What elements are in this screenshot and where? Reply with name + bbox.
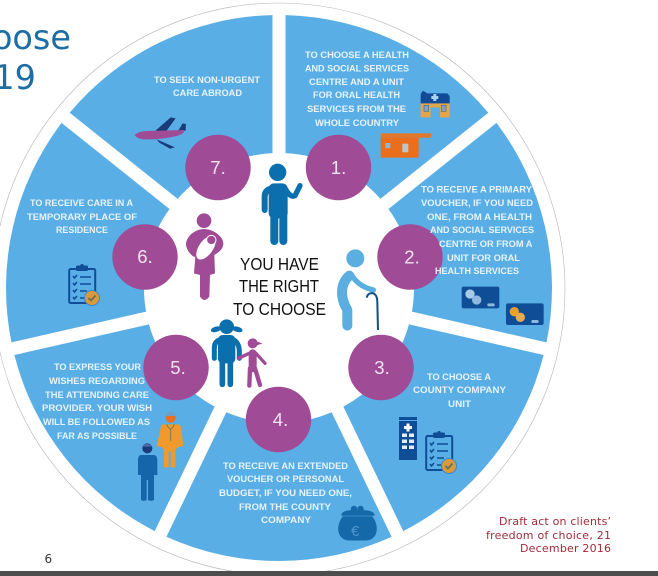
- icon: coin purse: €: [351, 523, 360, 540]
- panel: right 4, extended voucher or personal budget: [166, 387, 392, 561]
- panel: right 2, receive a primary voucher: ONE, FROM A HEALTH: [427, 212, 532, 222]
- heading: you have the right to choose: THE RIGHT: [239, 276, 319, 296]
- panel: right 6, care in a temporary place of residence: RESIDENCE: [56, 225, 108, 235]
- panel: right 4, extended voucher or personal budget: BUDGET, IF YOU NEED ONE,: [219, 488, 352, 498]
- panel: right 7, seek non-urgent care abroad: CARE ABROAD: [173, 88, 242, 98]
- panel: right 5, express your wishes: WILL BE FOLLOWED AS: [43, 417, 150, 427]
- panel: right 3, choose a county company unit: UNIT: [448, 399, 472, 409]
- panel: right 7, seek non-urgent care abroad: 7.: [210, 157, 226, 178]
- panel: right 4, extended voucher or personal budget: TO RECEIVE AN EXTENDED: [223, 461, 348, 471]
- icon: two children: [210, 319, 265, 386]
- panel: right 4, extended voucher or personal budget: 4.: [273, 409, 288, 430]
- panel: right 1, choose a health and social services centre: CENTRE AND A UNIT: [309, 77, 405, 87]
- icon: mother with baby: [186, 213, 223, 300]
- source note: [486, 515, 611, 555]
- icon: health centre house: [421, 91, 450, 117]
- panel: right 3, choose a county company unit: 3.: [374, 357, 390, 378]
- panel: right 5, express your wishes: [14, 324, 215, 531]
- panel: right 5, express your wishes: 5.: [170, 357, 186, 378]
- heading: you have the right to choose: TO CHOOSE: [233, 299, 326, 319]
- panel: right 1, choose a health and social services centre: TO CHOOSE A HEALTH: [305, 50, 409, 60]
- panel: right 2, receive a primary voucher: AND SOCIAL SERVICES: [430, 225, 534, 235]
- panel: right 2, receive a primary voucher: 2.: [404, 246, 420, 268]
- panel: right 5, express your wishes: PROVIDER. YOUR WISH: [42, 403, 152, 413]
- panel: right 6, care in a temporary place of residence: TEMPORARY PLACE OF: [27, 212, 138, 222]
- panel: right 5, express your wishes: WISHES REGARDING: [49, 376, 145, 386]
- panel: right 1, choose a health and social services centre: SERVICES FROM THE: [307, 104, 406, 114]
- heading: you have the right to choose: YOU HAVE: [240, 254, 319, 274]
- panel: right 5, express your wishes: TO EXPRESS YOUR: [54, 362, 142, 372]
- panel: right 2, receive a primary voucher: [377, 123, 552, 342]
- panel: right 1, choose a health and social services centre: 1.: [331, 157, 346, 178]
- icon: hospital tower: [399, 417, 417, 460]
- panel: right 5, express your wishes: FAR AS POSSIBLE: [57, 431, 137, 441]
- panel: right 2, receive a primary voucher: TO RECEIVE A PRIMARY: [421, 184, 532, 194]
- panel: right 4, extended voucher or personal budget: VOUCHER OR PERSONAL: [227, 474, 345, 484]
- icon: aeroplane: [135, 117, 186, 149]
- icon: clipboard with check: [69, 264, 100, 306]
- bottom band: [0, 571, 658, 576]
- panel: right 2, receive a primary voucher: VOUCHER, IF YOU NEED: [421, 198, 533, 208]
- source note: Draft act on clients’: [499, 515, 611, 528]
- panel: right 6, care in a temporary place of residence: 6.: [137, 246, 153, 267]
- title fragment: [0, 18, 71, 97]
- panel: right 2, receive a primary voucher: UNIT FOR ORAL: [447, 253, 521, 263]
- panel: right 4, extended voucher or personal budget: COMPANY: [261, 515, 311, 525]
- panel: right 6, care in a temporary place of residence: [6, 123, 178, 342]
- panel: right 2, receive a primary voucher: HEALTH SERVICES: [435, 266, 519, 276]
- icon: clipboard with check: [426, 431, 456, 474]
- icon: voucher cards: [462, 287, 544, 325]
- panel: right 6, care in a temporary place of residence: TO RECEIVE CARE IN A: [30, 198, 134, 208]
- panel: right 5, express your wishes: THE ATTENDING CARE: [45, 390, 149, 400]
- panel: right 4, extended voucher or personal budget: FROM THE COUNTY: [239, 502, 331, 512]
- page number: 6: [44, 552, 52, 566]
- source note: December 2016: [520, 542, 611, 555]
- panel: right 3, choose a county company unit: COUNTY COMPANY: [413, 385, 506, 395]
- icon: coin purse: [338, 506, 377, 540]
- panel: right 7, seek non-urgent care abroad: TO SEEK NON-URGENT: [154, 75, 261, 85]
- icon: elderly person with cane: [342, 249, 378, 330]
- panel: right 7, seek non-urgent care abroad: [70, 15, 272, 200]
- icon: doctor and patient: [138, 412, 183, 501]
- icon: standing man: [265, 164, 300, 241]
- heading: you have the right to choose: [233, 254, 326, 319]
- panel: right 1, choose a health and social services centre: [286, 15, 488, 200]
- panel: right 1, choose a health and social services centre: WHOLE COUNTRY: [315, 118, 399, 128]
- icon: oral health unit building: [381, 133, 431, 158]
- panel: right 1, choose a health and social services centre: AND SOCIAL SERVICES: [305, 64, 409, 74]
- source note: freedom of choice, 21: [486, 529, 611, 542]
- panel: right 3, choose a county company unit: TO CHOOSE A: [427, 372, 492, 382]
- panel: right 2, receive a primary voucher: CENTRE OR FROM A: [439, 239, 533, 249]
- panel: right 1, choose a health and social services centre: FOR ORAL HEALTH: [313, 90, 400, 100]
- panel: right 3, choose a county company unit: [343, 324, 544, 531]
